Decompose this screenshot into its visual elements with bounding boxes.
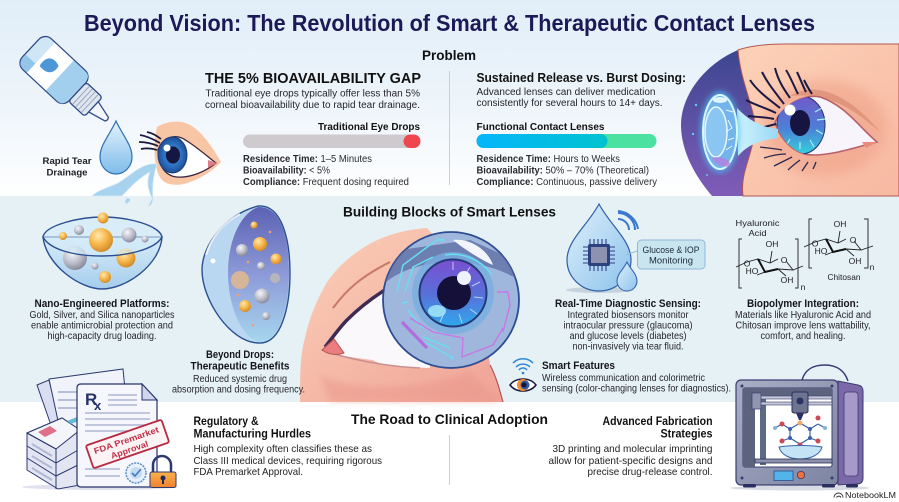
text: nano-engineered platforms: enable antimicrobial protection and — [31, 320, 173, 332]
text: biopolymer integration: Materials like Hyaluronic Acid and — [735, 310, 871, 321]
label: rapid tear drainage — [42, 156, 92, 178]
diagram: biopolymer structures: OH — [781, 275, 793, 285]
panel: problem — [16, 33, 899, 207]
diagram: biopolymer structures: Acid — [748, 228, 767, 238]
diagram: biopolymer structures: HO — [815, 246, 828, 256]
text: nano-engineered platforms: high-capacity drug loading. — [48, 331, 156, 342]
illustration: eye receiving lens — [681, 44, 899, 196]
diagram: biopolymer structures: O — [812, 238, 819, 248]
icon: eye with tears — [139, 122, 221, 185]
callout: glucose and IOP monitoring: Glucose & IOP — [642, 245, 700, 255]
icon: tear stream — [92, 164, 157, 207]
icon: FDA documents: FDA Premarket — [92, 424, 160, 456]
text: smart features: Wireless communication and colorimetric — [542, 373, 705, 384]
text: regulatory hurdles: Manufacturing Hurdles — [194, 428, 311, 440]
diagram: biopolymer structures: O — [781, 255, 788, 265]
text: real-time diagnostic sensing: non-invasively via tear fluid. — [572, 342, 684, 352]
text: smart features: Smart Features — [542, 360, 615, 372]
text: smart features — [542, 360, 731, 394]
text: bioavailability gap: THE 5% BIOAVAILABILITY GAP — [205, 70, 421, 87]
stats: functional contact lenses — [476, 154, 657, 188]
text: biopolymer integration: comfort, and healing. — [760, 331, 846, 342]
stats: traditional eye drops: Residence Time: 1–5 Minutes — [243, 154, 372, 165]
text: sustained release: Advanced lenses can deliver medication — [476, 87, 656, 98]
panel: road to clinical adoption — [22, 365, 870, 490]
text: advanced fabrication: 3D printing and molecular imprinting — [552, 443, 713, 455]
chart: functional contact lenses bar: Functional Contact Lenses — [476, 122, 605, 133]
icon: therapeutic lens — [202, 206, 290, 343]
text: smart features: sensing (color-changing lenses for diagnostics). — [542, 384, 731, 394]
stats: traditional eye drops — [243, 154, 409, 188]
diagram: biopolymer structures: Chitosan — [828, 272, 861, 282]
icon: FDA documents — [22, 369, 178, 490]
stats: traditional eye drops: Compliance: Frequent dosing required — [243, 177, 409, 188]
text: real-time diagnostic sensing — [555, 298, 701, 352]
diagram: biopolymer structures: O — [744, 258, 751, 268]
text: beyond drops: Reduced systemic drug — [193, 374, 287, 385]
text: advanced fabrication — [548, 416, 713, 478]
label: rapid tear drainage: Drainage — [46, 168, 88, 178]
icon: FDA documents: Approval — [109, 439, 150, 461]
diagram: biopolymer structures: HO — [746, 266, 759, 276]
icon: smart features wifi and eye — [510, 359, 536, 391]
text: regulatory hurdles: Class III medical devices, requiring rigorous — [194, 455, 382, 467]
icon: glucose sensor drop — [566, 204, 638, 293]
text: regulatory hurdles: FDA Premarket Approval. — [194, 466, 303, 478]
text: bioavailability gap — [205, 70, 421, 111]
text: beyond drops: Therapeutic Benefits — [190, 360, 290, 372]
icon: FDA documents: R — [85, 390, 97, 409]
title: Beyond Vision: The Revolution of Smart & Therapeutic Contact Lenses — [84, 10, 815, 36]
text: biopolymer integration: Biopolymer Integration: — [747, 298, 859, 310]
chart: traditional eye drops bar — [243, 122, 420, 148]
text: bioavailability gap: corneal bioavailability due to rapid tear drainage. — [205, 100, 420, 111]
diagram: biopolymer structures: n — [870, 262, 875, 272]
text: beyond drops: absorption and dosing frequency. — [172, 384, 305, 396]
illustration: central eye with smart lens — [300, 228, 519, 402]
text: real-time diagnostic sensing: Real-Time Diagnostic Sensing: — [555, 298, 701, 310]
text: regulatory hurdles: High complexity often classifies these as — [194, 443, 372, 455]
icon: eye drop bottle — [16, 33, 122, 135]
text: beyond drops — [172, 349, 305, 396]
diagram: biopolymer structures: OH — [834, 219, 846, 229]
text: regulatory hurdles: Regulatory & — [194, 416, 258, 428]
text: advanced fabrication: Advanced Fabrication — [602, 416, 712, 428]
icon: nanoparticle bowl — [43, 212, 162, 289]
diagram: biopolymer structures: Hyaluronic — [736, 218, 780, 228]
icon: 3D printer — [730, 365, 870, 490]
text: advanced fabrication: Strategies — [660, 428, 712, 440]
chart: functional contact lenses bar — [476, 122, 656, 148]
panel: building blocks — [30, 204, 875, 402]
text: nano-engineered platforms — [30, 298, 174, 342]
diagram: biopolymer structures: O — [850, 235, 857, 245]
text: real-time diagnostic sensing: Integrated biosensors monitor — [568, 310, 689, 321]
label: rapid tear drainage: Rapid Tear — [42, 156, 92, 166]
text: biopolymer integration — [735, 298, 871, 342]
text: beyond drops: Beyond Drops: — [206, 349, 274, 361]
text: biopolymer integration: Chitosan improve lens wattability, — [736, 320, 870, 332]
callout: glucose and IOP monitoring: Monitoring — [649, 256, 693, 266]
stats: traditional eye drops: Bioavailability: < 5% — [243, 166, 330, 176]
text: nano-engineered platforms: Nano-Engineered Platforms: — [34, 298, 170, 310]
text: sustained release: consistently for several hours to 14+ days. — [476, 98, 662, 109]
stats: functional contact lenses: Residence Time: Hours to Weeks — [476, 154, 620, 165]
stats: functional contact lenses: Compliance: Continuous, passive delivery — [476, 177, 657, 188]
text: bioavailability gap: Traditional eye drops typically offer less than 5% — [206, 88, 420, 100]
text: regulatory hurdles — [194, 416, 382, 478]
chart: traditional eye drops bar: Traditional Eye Drops — [318, 122, 420, 133]
text: sustained release — [476, 71, 686, 109]
text: real-time diagnostic sensing: intraocular pressure (glaucoma) — [564, 320, 692, 332]
text: advanced fabrication: precise drug-release control. — [588, 466, 712, 478]
stats: functional contact lenses: Bioavailability: 50% – 70% (Theoretical) — [476, 166, 649, 176]
diagram: biopolymer structures: OH — [766, 239, 778, 249]
diagram: biopolymer structures: n — [801, 282, 806, 292]
heading: problem: Problem — [422, 47, 476, 63]
heading: building blocks: Building Blocks of Smart Lenses — [343, 204, 556, 220]
callout: glucose and IOP monitoring — [638, 240, 705, 269]
heading: road to clinical adoption: The Road to Clinical Adoption — [351, 412, 548, 427]
text: nano-engineered platforms: Gold, Silver, and Silica nanoparticles — [30, 310, 174, 321]
icon: falling drop — [100, 121, 132, 174]
diagram: biopolymer structures: OH — [849, 256, 861, 266]
NotebookLM badge: NotebookLM — [845, 490, 896, 500]
text: sustained release: Sustained Release vs. Burst Dosing: — [476, 71, 686, 85]
icon: FDA documents: x — [94, 398, 102, 413]
text: advanced fabrication: allow for patient-specific designs and — [548, 455, 713, 467]
diagram: biopolymer structures — [736, 218, 875, 292]
text: real-time diagnostic sensing: and glucose levels (diabetes) — [570, 331, 686, 342]
